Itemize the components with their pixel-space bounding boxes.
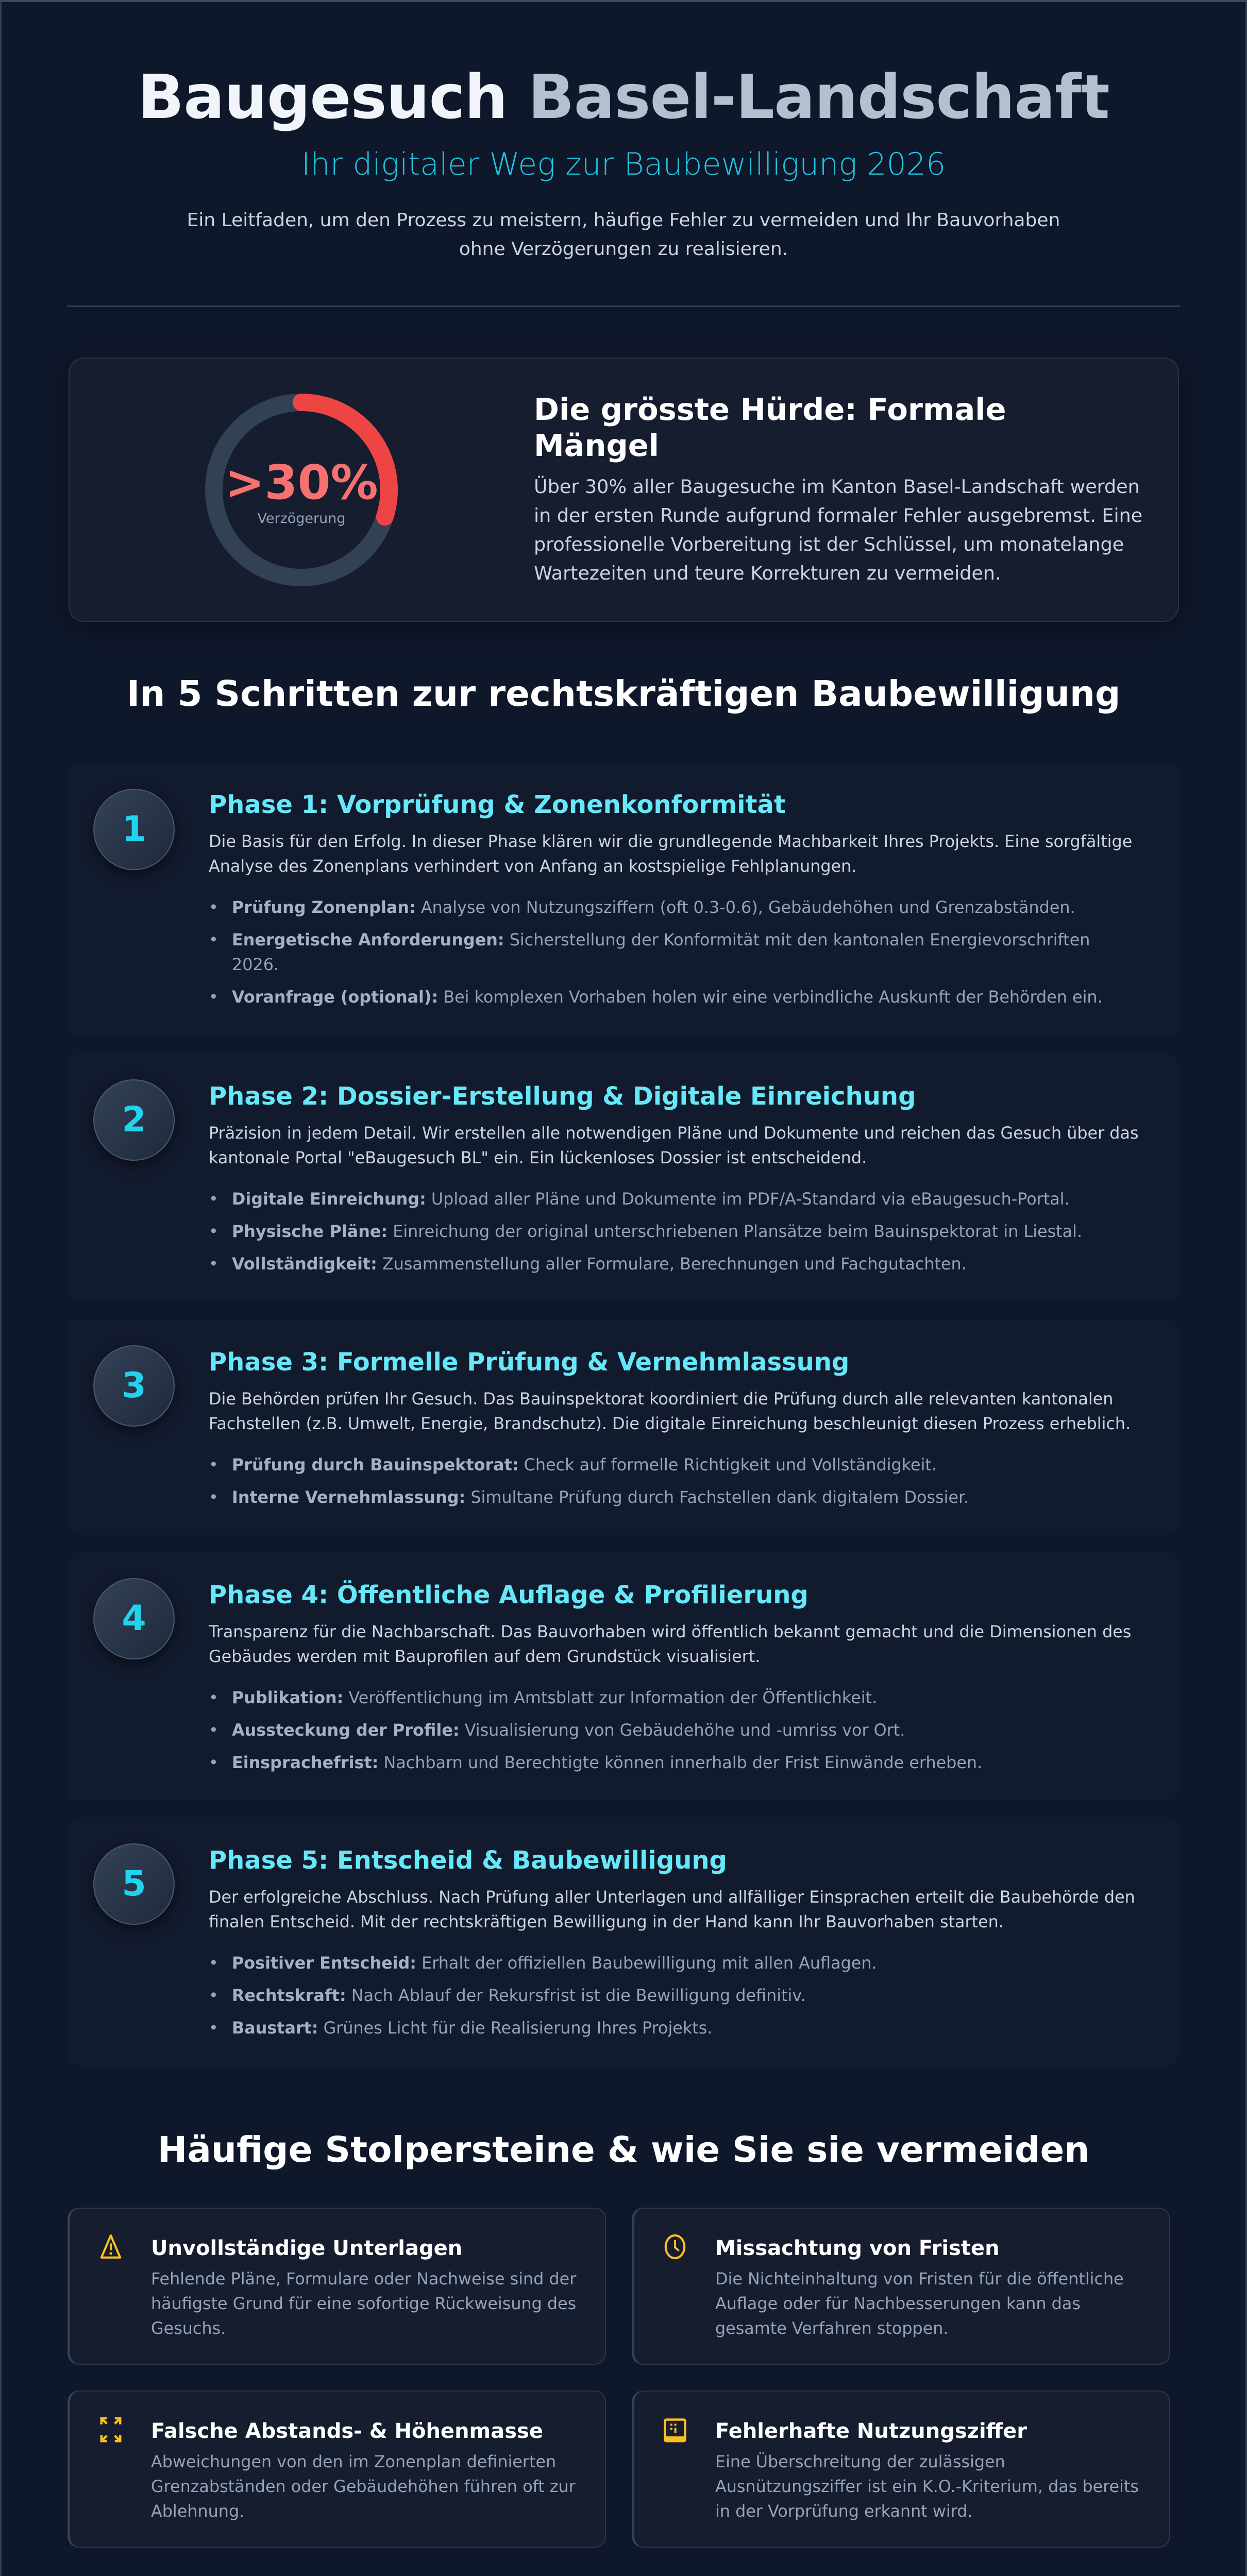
donut chart: >30%: >30%: [225, 455, 378, 510]
panel: phase 2: Phase 2: Dossier-Erstellung & Digitale Einreichung: [209, 1082, 916, 1111]
panel: pitfall 3: Falsche Abstands- & Höhenmasse: [151, 2419, 543, 2443]
panel: pitfall 1: Unvollständige Unterlagen: [151, 2236, 462, 2260]
icon: expand arrows: [100, 2417, 122, 2442]
panel: pitfall 4: Eine Überschreitung der zulässigen Ausnützungsziffer ist ein K.O.-Kriterium, das bereits in der Vorprüfung erkannt wird.: [715, 2452, 1139, 2521]
panel: phase 1: Voranfrage (optional): Bei komplexen Vorhaben holen wir eine verbindliche Auskunft der Behörden ein.: [232, 988, 1103, 1007]
panel: pitfall 4: [632, 2391, 1170, 2548]
panel: phase 1: Prüfung Zonenplan: Analyse von Nutzungsziffern (oft 0.3-0.6), Gebäudehöhen und Grenzabständen.: [232, 898, 1075, 917]
panel: phase 4: [67, 1552, 1179, 1801]
badge 3: 3: [122, 1365, 146, 1406]
panel: phase 2: Physische Pläne: Einreichung der original unterschriebenen Plansätze beim Bauinspektorat in Liestal.: [232, 1222, 1082, 1241]
stat paragraph: Über 30% aller Baugesuche im Kanton Basel-Landschaft werden in der ersten Runde aufgrund formaler Fehler ausgebremst. Eine professionelle Vorbereitung ist der Schlüssel, um monatelange Wartezeiten und teure Korrekturen zu vermeiden.: [534, 476, 1142, 584]
icon: clock: [665, 2234, 685, 2260]
panel: phase 2: Vollständigkeit: Zusammenstellung aller Formulare, Berechnungen und Fachgutachten.: [232, 1255, 967, 1274]
panel: phase 2: [67, 1054, 1179, 1302]
panel: phase 5: Der erfolgreiche Abschluss. Nach Prüfung aller Unterlagen und allfälliger Einsprachen erteilt die Baubehörde den finalen Entscheid. Mit der rechtskräftigen Bewilligung in der Hand kann Ihr Bauvorhaben starten.: [209, 1888, 1135, 1931]
panel: phase 3: Phase 3: Formelle Prüfung & Vernehmlassung: [209, 1348, 849, 1377]
badge 3: [93, 1345, 175, 1427]
badge 1: [93, 789, 175, 870]
panel: phase 5: Positiver Entscheid: Erhalt der offiziellen Baubewilligung mit allen Auflagen.: [232, 1954, 877, 1973]
intro text: [187, 210, 1060, 260]
panel: stat card: [69, 358, 1179, 622]
panel: phase 1: Energetische Anforderungen: Sicherstellung der Konformität mit den kantonalen Energievorschriften 2026.: [232, 930, 1090, 974]
panel: pitfall 2: Die Nichteinhaltung von Fristen für die öffentliche Auflage oder für Nachbesserungen kann das gesamte Verfahren stoppen.: [715, 2269, 1124, 2338]
panel: pitfall 1: [68, 2208, 606, 2365]
panel: phase 3: Die Behörden prüfen Ihr Gesuch. Das Bauinspektorat koordiniert die Prüfung durch alle relevanten kantonalen Fachstellen (z.B. Umwelt, Energie, Brandschutz). Die digitale Einreichung beschleunigt diesen Prozess erheblich.: [209, 1389, 1131, 1433]
panel: phase 4: Einsprachefrist: Nachbarn und Berechtigte können innerhalb der Frist Einwände erheben.: [232, 1753, 982, 1772]
badge 2: [93, 1079, 175, 1161]
panel: phase 1: Die Basis für den Erfolg. In dieser Phase klären wir die grundlegende Machbarkeit Ihres Projekts. Eine sorgfältige Analyse des Zonenplans verhindert von Anfang an kostspielige Fehlplanungen.: [209, 832, 1132, 876]
donut chart: >30%: [205, 394, 398, 586]
panel: phase 3: [67, 1319, 1179, 1535]
panel: phase 3: Interne Vernehmlassung: Simultane Prüfung durch Fachstellen dank digitalem Dossier.: [232, 1488, 969, 1507]
heading: Stolpersteine: Häufige Stolpersteine & wie Sie sie vermeiden: [158, 2129, 1089, 2171]
icon: warning: [100, 2234, 122, 2259]
panel: phase 2: Präzision in jedem Detail. Wir erstellen alle notwendigen Pläne und Dokumente und reichen das Gesuch über das kantonale Portal "eBaugesuch BL" ein. Ein lückenloses Dossier ist entscheidend.: [209, 1124, 1139, 1167]
panel: phase 5: Baustart: Grünes Licht für die Realisierung Ihres Projekts.: [232, 2019, 712, 2038]
subtitle: Ihr digitaler Weg zur Baubewilligung 2026: [301, 146, 946, 182]
intro text: ohne Verzögerungen zu realisieren.: [459, 239, 788, 260]
panel: phase 1: [67, 762, 1179, 1036]
panel: pitfall 1: Fehlende Pläne, Formulare oder Nachweise sind der häufigste Grund für eine sofortige Rückweisung des Gesuchs.: [151, 2269, 576, 2338]
panel: phase 4: Publikation: Veröffentlichung im Amtsblatt zur Information der Öffentlichkeit.: [232, 1688, 877, 1707]
panel: pitfall 3: [68, 2391, 606, 2548]
panel: phase 4: Phase 4: Öffentliche Auflage & Profilierung: [209, 1581, 808, 1609]
intro text: Ein Leitfaden, um den Prozess zu meistern, häufige Fehler zu vermeiden und Ihr Bauvorhaben: [187, 210, 1060, 231]
stat heading: Die grösste Hürde: Formale Mängel: [534, 392, 1006, 463]
badge 4: [93, 1578, 175, 1659]
panel: phase 5: Phase 5: Entscheid & Baubewilligung: [209, 1846, 727, 1875]
badge 2: 2: [122, 1099, 146, 1140]
badge 5: [93, 1843, 175, 1925]
badge 5: 5: [122, 1863, 146, 1904]
panel: phase 5: Rechtskraft: Nach Ablauf der Rekursfrist ist die Bewilligung definitiv.: [232, 1986, 806, 2005]
panel: pitfall 2: Missachtung von Fristen: [715, 2236, 1000, 2260]
panel: phase 4: Aussteckung der Profile: Visualisierung von Gebäudehöhe und -umriss vor Ort.: [232, 1721, 905, 1740]
icon: calculator: [664, 2418, 686, 2442]
panel: phase 5: [67, 1818, 1179, 2066]
badge 1: 1: [122, 809, 146, 850]
badge 4: 4: [122, 1598, 146, 1639]
panel: phase 4: Transparenz für die Nachbarschaft. Das Bauvorhaben wird öffentlich bekannt gemacht und die Dimensionen des Gebäudes werden mit Bauprofilen auf dem Grundstück visualisiert.: [209, 1622, 1131, 1666]
donut chart: >30%: Verzögerung: [258, 511, 345, 527]
panel: pitfall 3: Abweichungen von den im Zonenplan definierten Grenzabständen oder Gebäudehöhen führen oft zur Ablehnung.: [151, 2452, 576, 2521]
panel: phase 2: Digitale Einreichung: Upload aller Pläne und Dokumente im PDF/A-Standard via eBaugesuch-Portal.: [232, 1190, 1070, 1209]
panel: phase 3: Prüfung durch Bauinspektorat: Check auf formelle Richtigkeit und Vollständigkeit.: [232, 1455, 937, 1475]
panel: pitfall 2: [632, 2208, 1170, 2365]
panel: phase 1: Phase 1: Vorprüfung & Zonenkonformität: [209, 790, 786, 819]
heading: 5 Schritte: In 5 Schritten zur rechtskräftigen Baubewilligung: [127, 673, 1120, 715]
panel: pitfall 4: Fehlerhafte Nutzungsziffer: [715, 2419, 1027, 2443]
title: Baugesuch Basel-Landschaft: [138, 61, 1109, 132]
